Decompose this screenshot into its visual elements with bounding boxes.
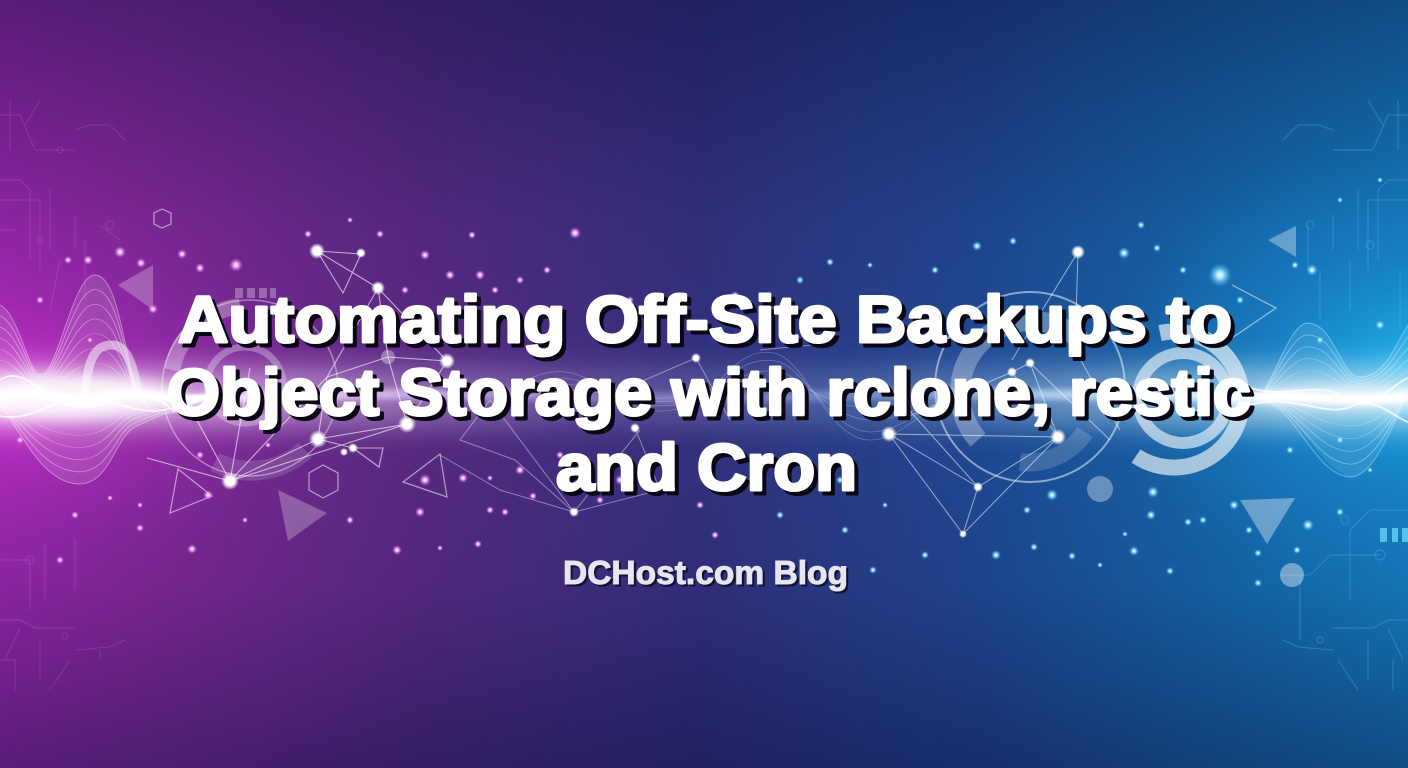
title: and Cron	[556, 430, 857, 504]
icon: left circular sync rings	[162, 300, 338, 476]
title: Object Storage with rclone, restic	[167, 355, 1251, 429]
network lines: centre	[440, 310, 815, 512]
network lines: right	[889, 252, 1120, 534]
outlined triangles and hexagons	[154, 209, 1276, 513]
filled triangles and circles	[118, 226, 1408, 587]
circuit traces: right edge	[1280, 100, 1408, 690]
title: Automating Off-Site Backups to	[178, 282, 1232, 356]
network nodes	[221, 243, 1085, 538]
circuit traces: left edge	[0, 100, 125, 690]
icon: right concentric rings	[935, 292, 1242, 482]
network lines: left	[147, 251, 447, 481]
title	[167, 282, 1251, 504]
wave mesh: left	[0, 275, 210, 484]
particles: purple	[16, 217, 739, 564]
particles: blue	[776, 177, 1385, 587]
light beam	[0, 368, 1408, 426]
subtitle: DCHost.com Blog	[563, 554, 848, 591]
wave mesh: right	[1260, 323, 1408, 477]
wave mesh: centre	[500, 352, 950, 440]
